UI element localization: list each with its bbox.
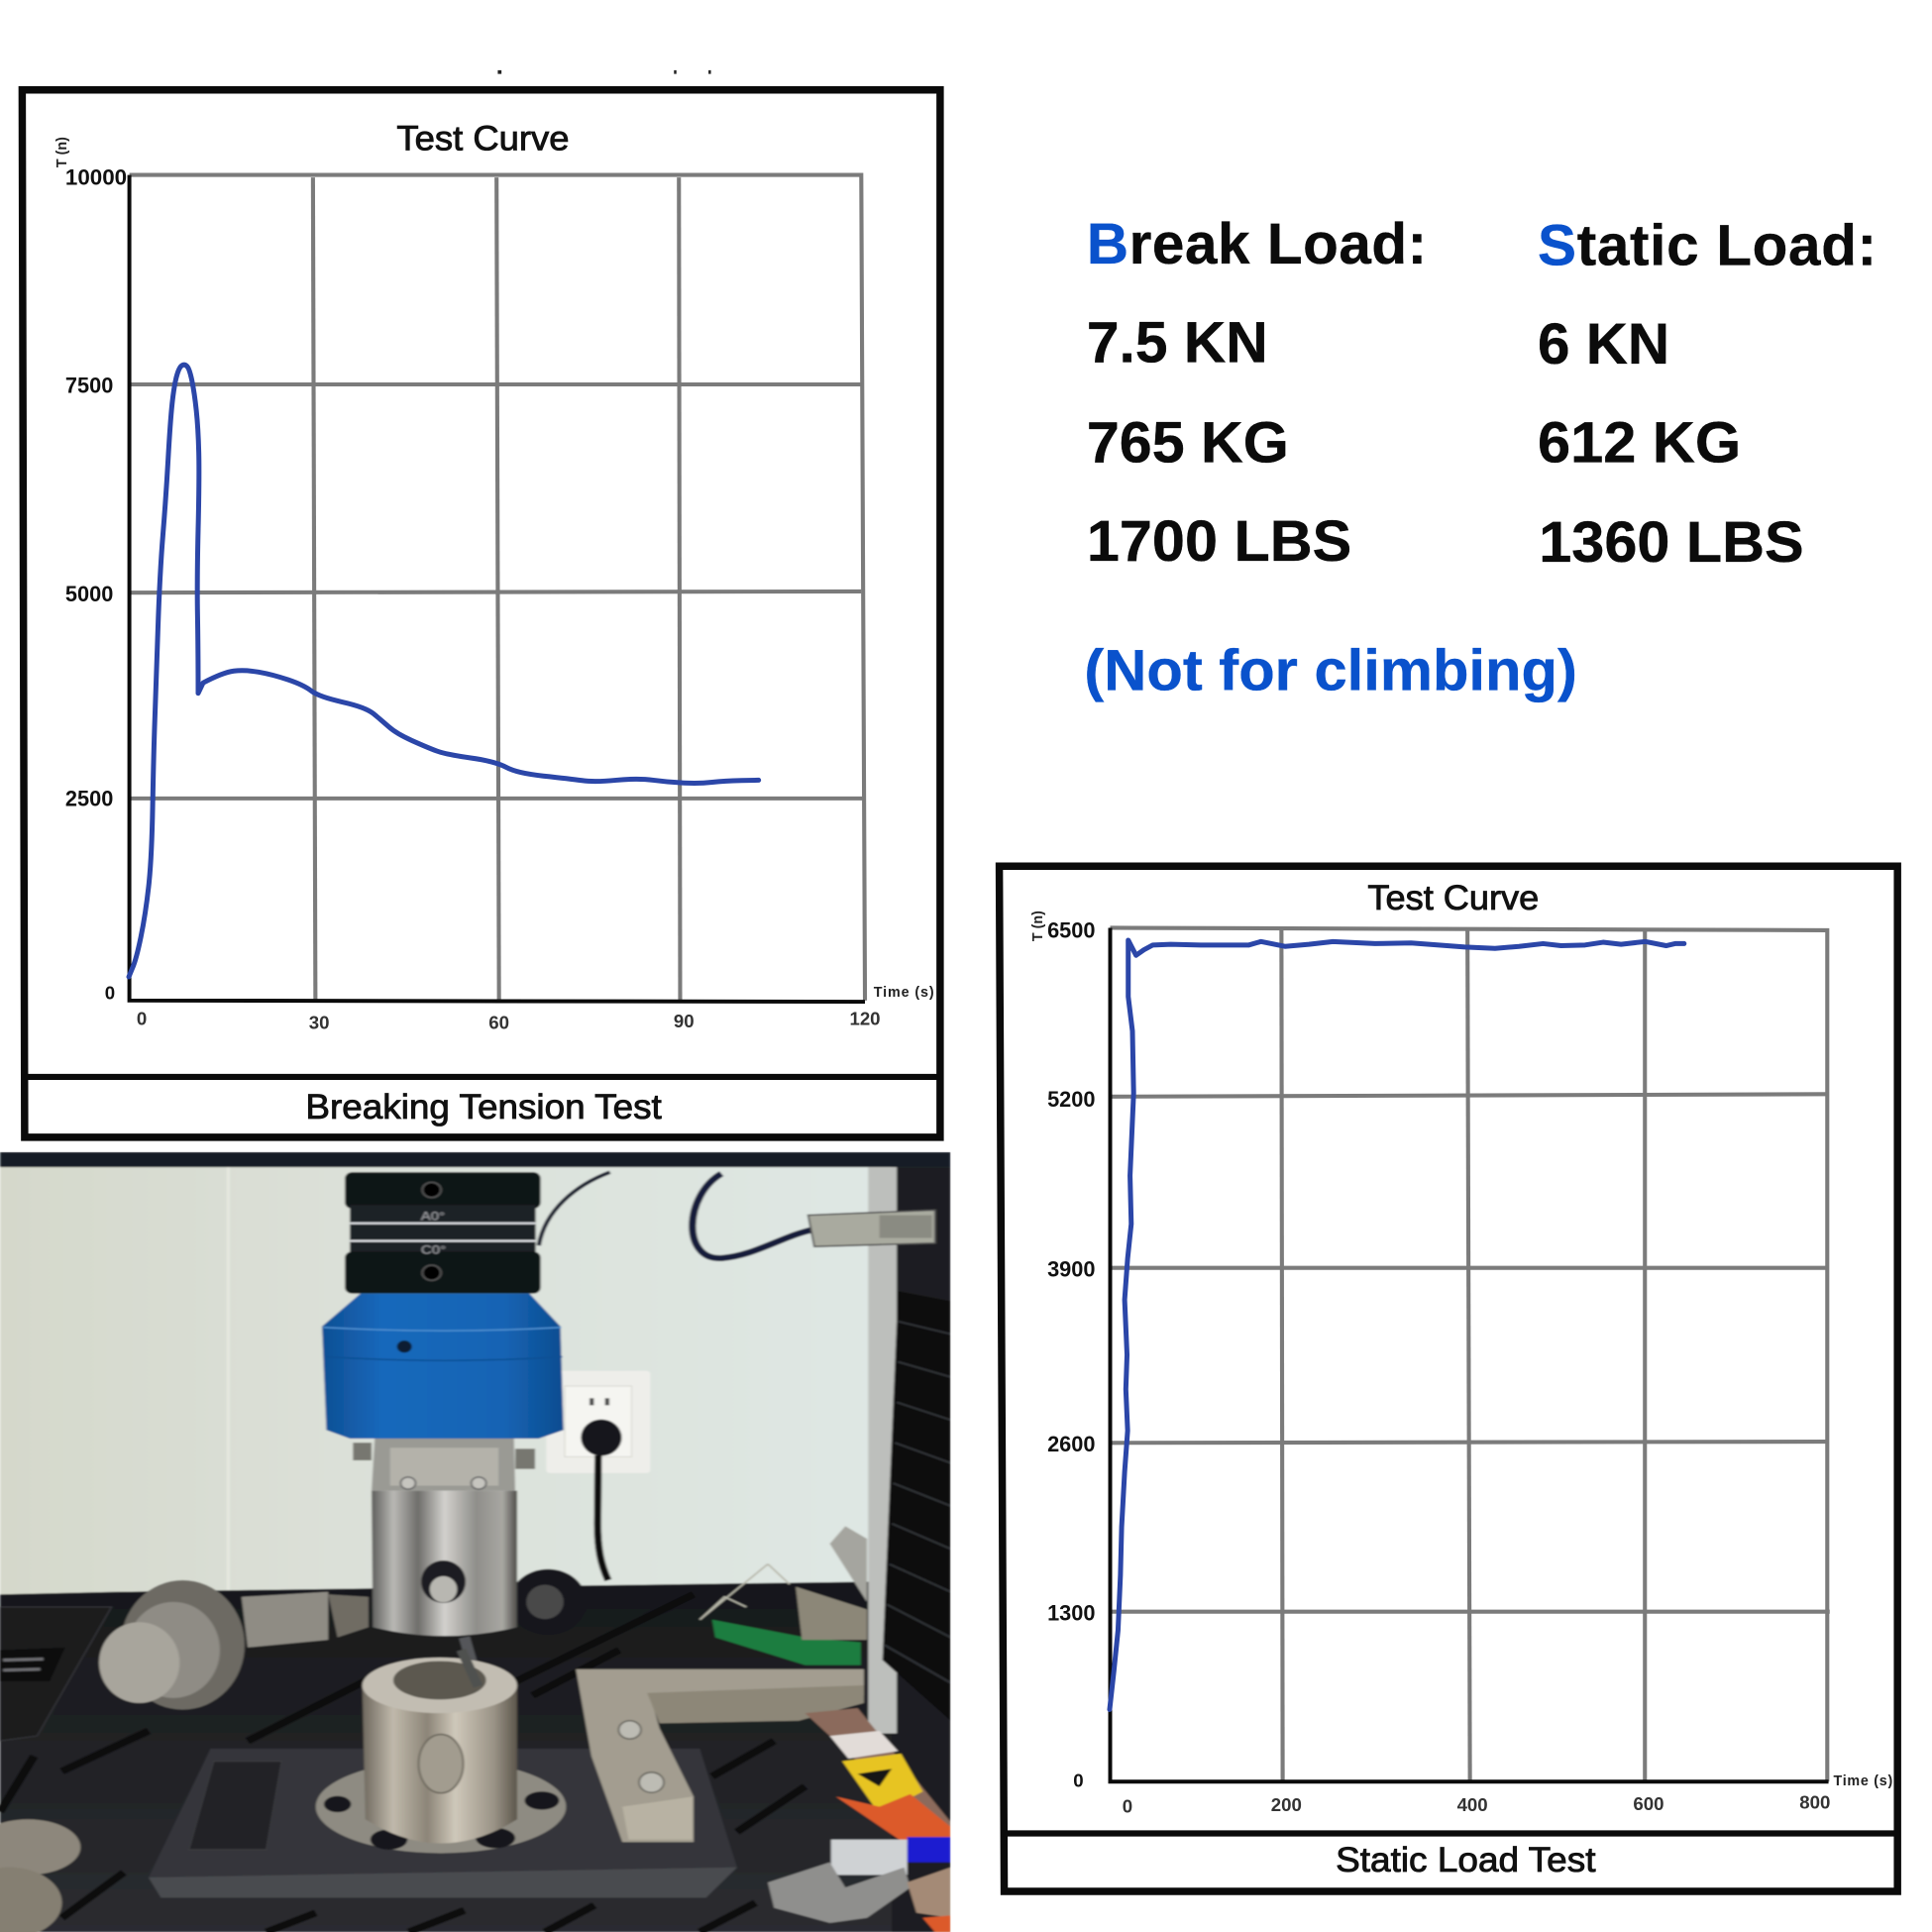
chart title: Test Curve [1367, 878, 1539, 917]
wall socket [546, 1371, 650, 1473]
x axis labels [1123, 1773, 1892, 1816]
x axis labels: 60 [488, 1012, 509, 1032]
y axis labels: 1300 [1047, 1600, 1095, 1625]
x axis labels: Time (s) [1834, 1773, 1892, 1789]
cable connector [808, 1210, 935, 1246]
striped strap [805, 1708, 950, 1847]
chart frame [1000, 866, 1897, 1891]
clamp head [353, 1439, 535, 1491]
x axis labels: Time (s) [874, 985, 934, 1001]
caption divider [1003, 1831, 1895, 1836]
base plate [150, 1748, 737, 1877]
lower steel socket [363, 1650, 517, 1844]
work table [0, 1581, 950, 1932]
y axis labels: 2500 [65, 786, 113, 810]
static load values [1538, 312, 1804, 575]
y axis labels [65, 165, 127, 1004]
axes [1111, 927, 1829, 1781]
caption: Static Load Test [1336, 1840, 1596, 1879]
steel L bracket [576, 1669, 864, 1842]
grid lines [130, 175, 865, 1001]
blue load cell [322, 1294, 564, 1439]
chart frame [22, 90, 940, 1137]
steel flange [316, 1761, 566, 1853]
break test curve [129, 365, 759, 977]
x axis labels: 0 [137, 1009, 147, 1029]
x axis labels: 30 [309, 1012, 329, 1032]
y axis unit: T (n) [54, 137, 70, 167]
y axis labels: 2600 [1047, 1432, 1095, 1456]
y axis labels: 7500 [65, 374, 113, 398]
y axis unit: T (n) [1030, 911, 1046, 941]
y axis labels: 5000 [65, 582, 113, 606]
heading: static load: Static Load: [1538, 213, 1877, 277]
left steel fixture [99, 1580, 369, 1710]
x axis labels: 200 [1271, 1794, 1302, 1815]
heading: break load: Break Load: [1087, 212, 1427, 276]
break load values: 7.5 KN [1087, 311, 1268, 376]
break load values [1087, 311, 1351, 574]
panel: load ratings text [1084, 212, 1877, 702]
x axis labels: 800 [1799, 1792, 1830, 1813]
y axis labels: 0 [105, 983, 115, 1004]
right machine housing [868, 1167, 950, 1932]
clipped text fragments above chart [497, 70, 711, 74]
caption divider [26, 1074, 937, 1079]
break load values: 1700 LBS [1087, 509, 1351, 574]
y axis labels: 10000 [65, 165, 127, 190]
x axis labels: 400 [1457, 1794, 1488, 1815]
x axis labels [137, 985, 934, 1032]
static load values: 1360 LBS [1539, 510, 1804, 575]
y axis labels: 5200 [1047, 1087, 1095, 1112]
bottom right tool [768, 1837, 950, 1932]
panel: breaking tension test chart [22, 90, 940, 1137]
x axis labels: 90 [674, 1011, 695, 1031]
y axis labels [1047, 917, 1095, 1790]
table slots [0, 1594, 805, 1932]
top crossbar [0, 1152, 950, 1167]
warning note: (Not for climbing) [1084, 638, 1577, 702]
table emblem [0, 1607, 112, 1741]
green circuit board [699, 1526, 867, 1665]
static test curve [1110, 940, 1684, 1709]
black collar [345, 1172, 541, 1294]
wall [0, 1152, 950, 1607]
static load values: 6 KN [1538, 312, 1669, 376]
static load values: 612 KG [1538, 410, 1741, 475]
black collar: C0° [421, 1243, 446, 1256]
black ring [515, 1567, 583, 1588]
grid lines [1111, 927, 1830, 1781]
x axis labels: 600 [1633, 1793, 1664, 1814]
y axis labels: 6500 [1047, 917, 1095, 942]
wall cables [539, 1172, 610, 1245]
black collar: A0° [421, 1210, 445, 1223]
photo: tensile testing machine [0, 1152, 950, 1932]
panel: static load test chart [1000, 866, 1897, 1891]
bottom left fittings [0, 1819, 80, 1932]
y axis labels: 3900 [1047, 1256, 1095, 1281]
caption: Breaking Tension Test [305, 1087, 662, 1127]
axes [130, 175, 865, 1002]
chart title: Test Curve [396, 119, 570, 159]
x axis labels: 120 [849, 1009, 881, 1029]
rope sample [458, 1636, 478, 1661]
x axis labels: 0 [1123, 1795, 1132, 1816]
break load values: 765 KG [1087, 410, 1289, 475]
y axis labels: 0 [1073, 1770, 1084, 1790]
power plug and cord [581, 1420, 622, 1455]
upper steel grip [372, 1491, 517, 1636]
